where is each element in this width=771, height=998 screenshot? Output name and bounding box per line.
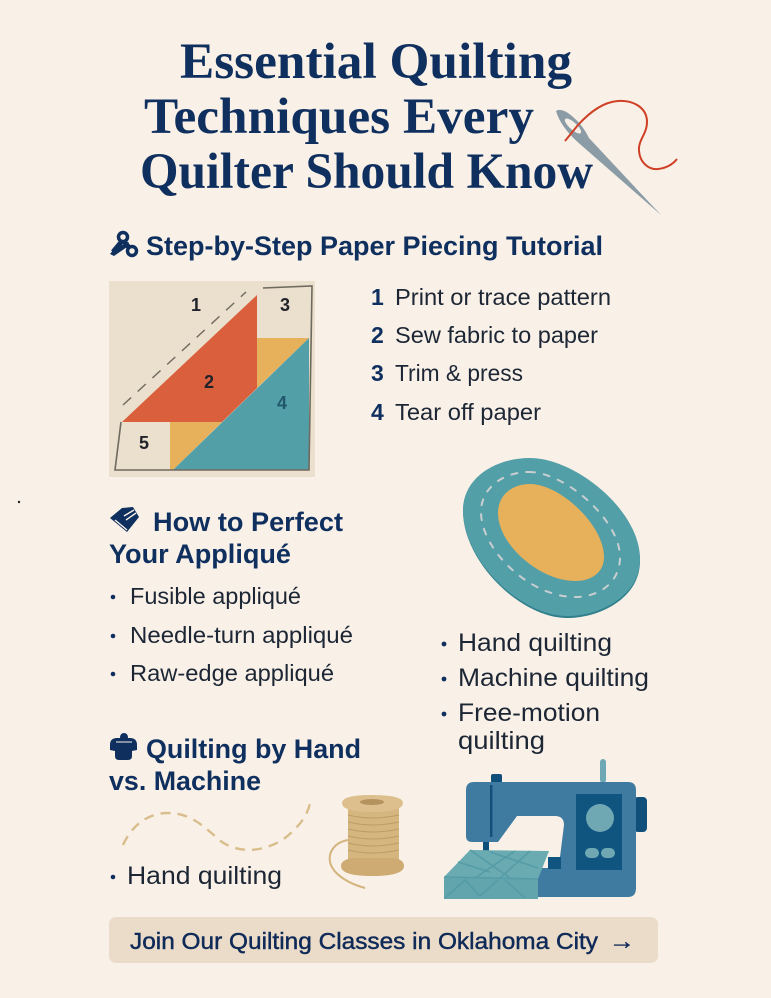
call to action button: → [609,928,635,954]
numbered steps: Tear off paper [395,399,541,425]
numbered steps: Sew fabric to paper [395,322,598,348]
numbered steps: 2 [371,322,384,348]
numbered steps [371,284,611,425]
applique list: Fusible appliqué [130,583,301,609]
title: Techniques Every [144,89,534,145]
heading: applique: How to Perfect [153,507,343,537]
numbered steps: 4 [371,399,384,425]
title: Essential Quilting [180,34,572,90]
heading: applique [109,507,343,569]
quilt block diagram: 5 [139,433,149,453]
heading: paper piecing: Step-by-Step Paper Piecing Tutorial [146,231,603,261]
icon: sewing machine [444,759,647,899]
applique list [111,583,353,686]
quilting list [442,629,649,755]
numbered steps: Trim & press [395,360,523,386]
quilting list: Hand quilting [458,629,612,657]
title [140,34,593,200]
quilting list: Free-motion [458,699,600,727]
dashed stitch line [123,803,310,850]
icon: applique [110,507,139,532]
quilt block diagram: 3 [280,295,290,315]
icon: needle and thread [556,101,677,215]
applique list: Raw-edge appliqué [130,660,334,686]
hand quilting item: Hand quilting [127,862,282,890]
heading: applique: Your Appliqué [109,539,291,569]
heading: hand vs machine: vs. Machine [109,766,261,796]
quilting list: quilting [458,727,545,755]
numbered steps: Print or trace pattern [395,284,611,310]
call to action button [109,917,658,963]
icon: paper piecing [110,232,136,256]
quilt block diagram: 2 [204,372,214,392]
heading: hand vs machine [109,734,361,796]
illustration: applique oval [463,458,640,618]
title: Quilter Should Know [140,144,593,200]
quilt block diagram: 4 [277,393,287,413]
numbered steps: 1 [371,284,384,310]
call to action button: Join Our Quilting Classes in Oklahoma City [130,928,599,954]
quilt block diagram: 1 [191,295,201,315]
quilting list: Machine quilting [458,664,649,692]
applique list: Needle-turn appliqué [130,622,353,648]
quilt block diagram [109,281,315,477]
heading: hand vs machine: Quilting by Hand [146,734,361,764]
icon: hand quilting [110,733,137,760]
icon: thread spool [330,795,404,888]
numbered steps: 3 [371,360,384,386]
